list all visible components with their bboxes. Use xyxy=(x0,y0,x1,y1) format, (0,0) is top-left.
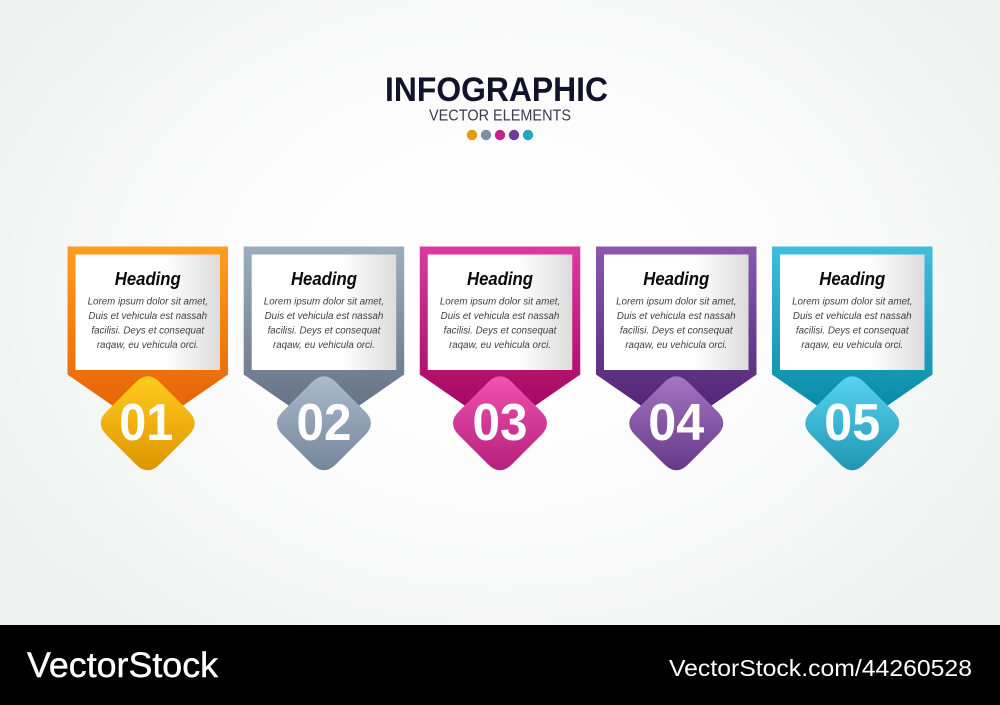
body text: Duis et vehicula est nassah xyxy=(617,311,736,322)
body text: facilisi. Deys et consequat xyxy=(444,326,558,336)
number diamond xyxy=(453,376,547,470)
footer url: VectorStock.com/44260528 xyxy=(669,655,972,681)
number diamond xyxy=(101,376,195,470)
number diamond xyxy=(805,376,899,470)
subtitle: VECTOR ELEMENTS xyxy=(429,108,571,124)
body text: Lorem ipsum dolor sit amet, xyxy=(616,296,736,308)
shield xyxy=(68,246,228,430)
heading: Heading xyxy=(467,269,533,289)
number diamond xyxy=(629,376,723,470)
footer bar xyxy=(0,625,1000,705)
number: 01 xyxy=(119,394,173,452)
footer logo: VectorStock xyxy=(27,646,219,685)
body text: Lorem ipsum dolor sit amet, xyxy=(792,296,912,308)
panel: step 01 xyxy=(68,246,228,470)
body text: raqaw, eu vehicula orci. xyxy=(449,340,551,351)
heading: Heading xyxy=(819,269,885,289)
shield xyxy=(244,246,404,430)
body text: raqaw, eu vehicula orci. xyxy=(625,340,727,351)
number: 05 xyxy=(824,394,880,452)
panel: step 03 xyxy=(420,246,580,470)
shield xyxy=(772,246,932,430)
number diamond xyxy=(277,376,371,470)
body text: Duis et vehicula est nassah xyxy=(88,311,207,322)
body text: facilisi. Deys et consequat xyxy=(268,326,382,336)
body text: facilisi. Deys et consequat xyxy=(796,326,910,336)
panel: step 04 xyxy=(596,246,756,470)
body text: Lorem ipsum dolor sit amet, xyxy=(264,296,384,308)
panel: step 05 xyxy=(772,246,932,470)
title: INFOGRAPHIC xyxy=(385,71,608,109)
panel: step 02 xyxy=(244,246,404,470)
text card xyxy=(76,254,220,370)
heading: Heading xyxy=(115,269,181,289)
number: 03 xyxy=(472,394,528,452)
body text: Duis et vehicula est nassah xyxy=(793,311,912,322)
number: 02 xyxy=(296,394,351,452)
colour dots xyxy=(467,130,533,140)
body text: facilisi. Deys et consequat xyxy=(620,326,734,336)
body text: raqaw, eu vehicula orci. xyxy=(273,340,375,351)
body text: facilisi. Deys et consequat xyxy=(91,326,205,336)
text card xyxy=(252,254,396,370)
text card xyxy=(428,254,572,370)
body text: Duis et vehicula est nassah xyxy=(441,311,559,322)
body text: raqaw, eu vehicula orci. xyxy=(97,340,199,351)
heading: Heading xyxy=(291,269,357,289)
text card xyxy=(604,254,748,370)
body text: Duis et vehicula est nassah xyxy=(265,311,383,322)
body text: Lorem ipsum dolor sit amet, xyxy=(88,296,208,308)
shield xyxy=(420,246,580,430)
body text: raqaw, eu vehicula orci. xyxy=(801,340,903,351)
number: 04 xyxy=(648,394,704,452)
text card xyxy=(780,254,924,370)
shield xyxy=(596,246,756,430)
heading: Heading xyxy=(643,269,709,289)
body text: Lorem ipsum dolor sit amet, xyxy=(440,296,560,308)
